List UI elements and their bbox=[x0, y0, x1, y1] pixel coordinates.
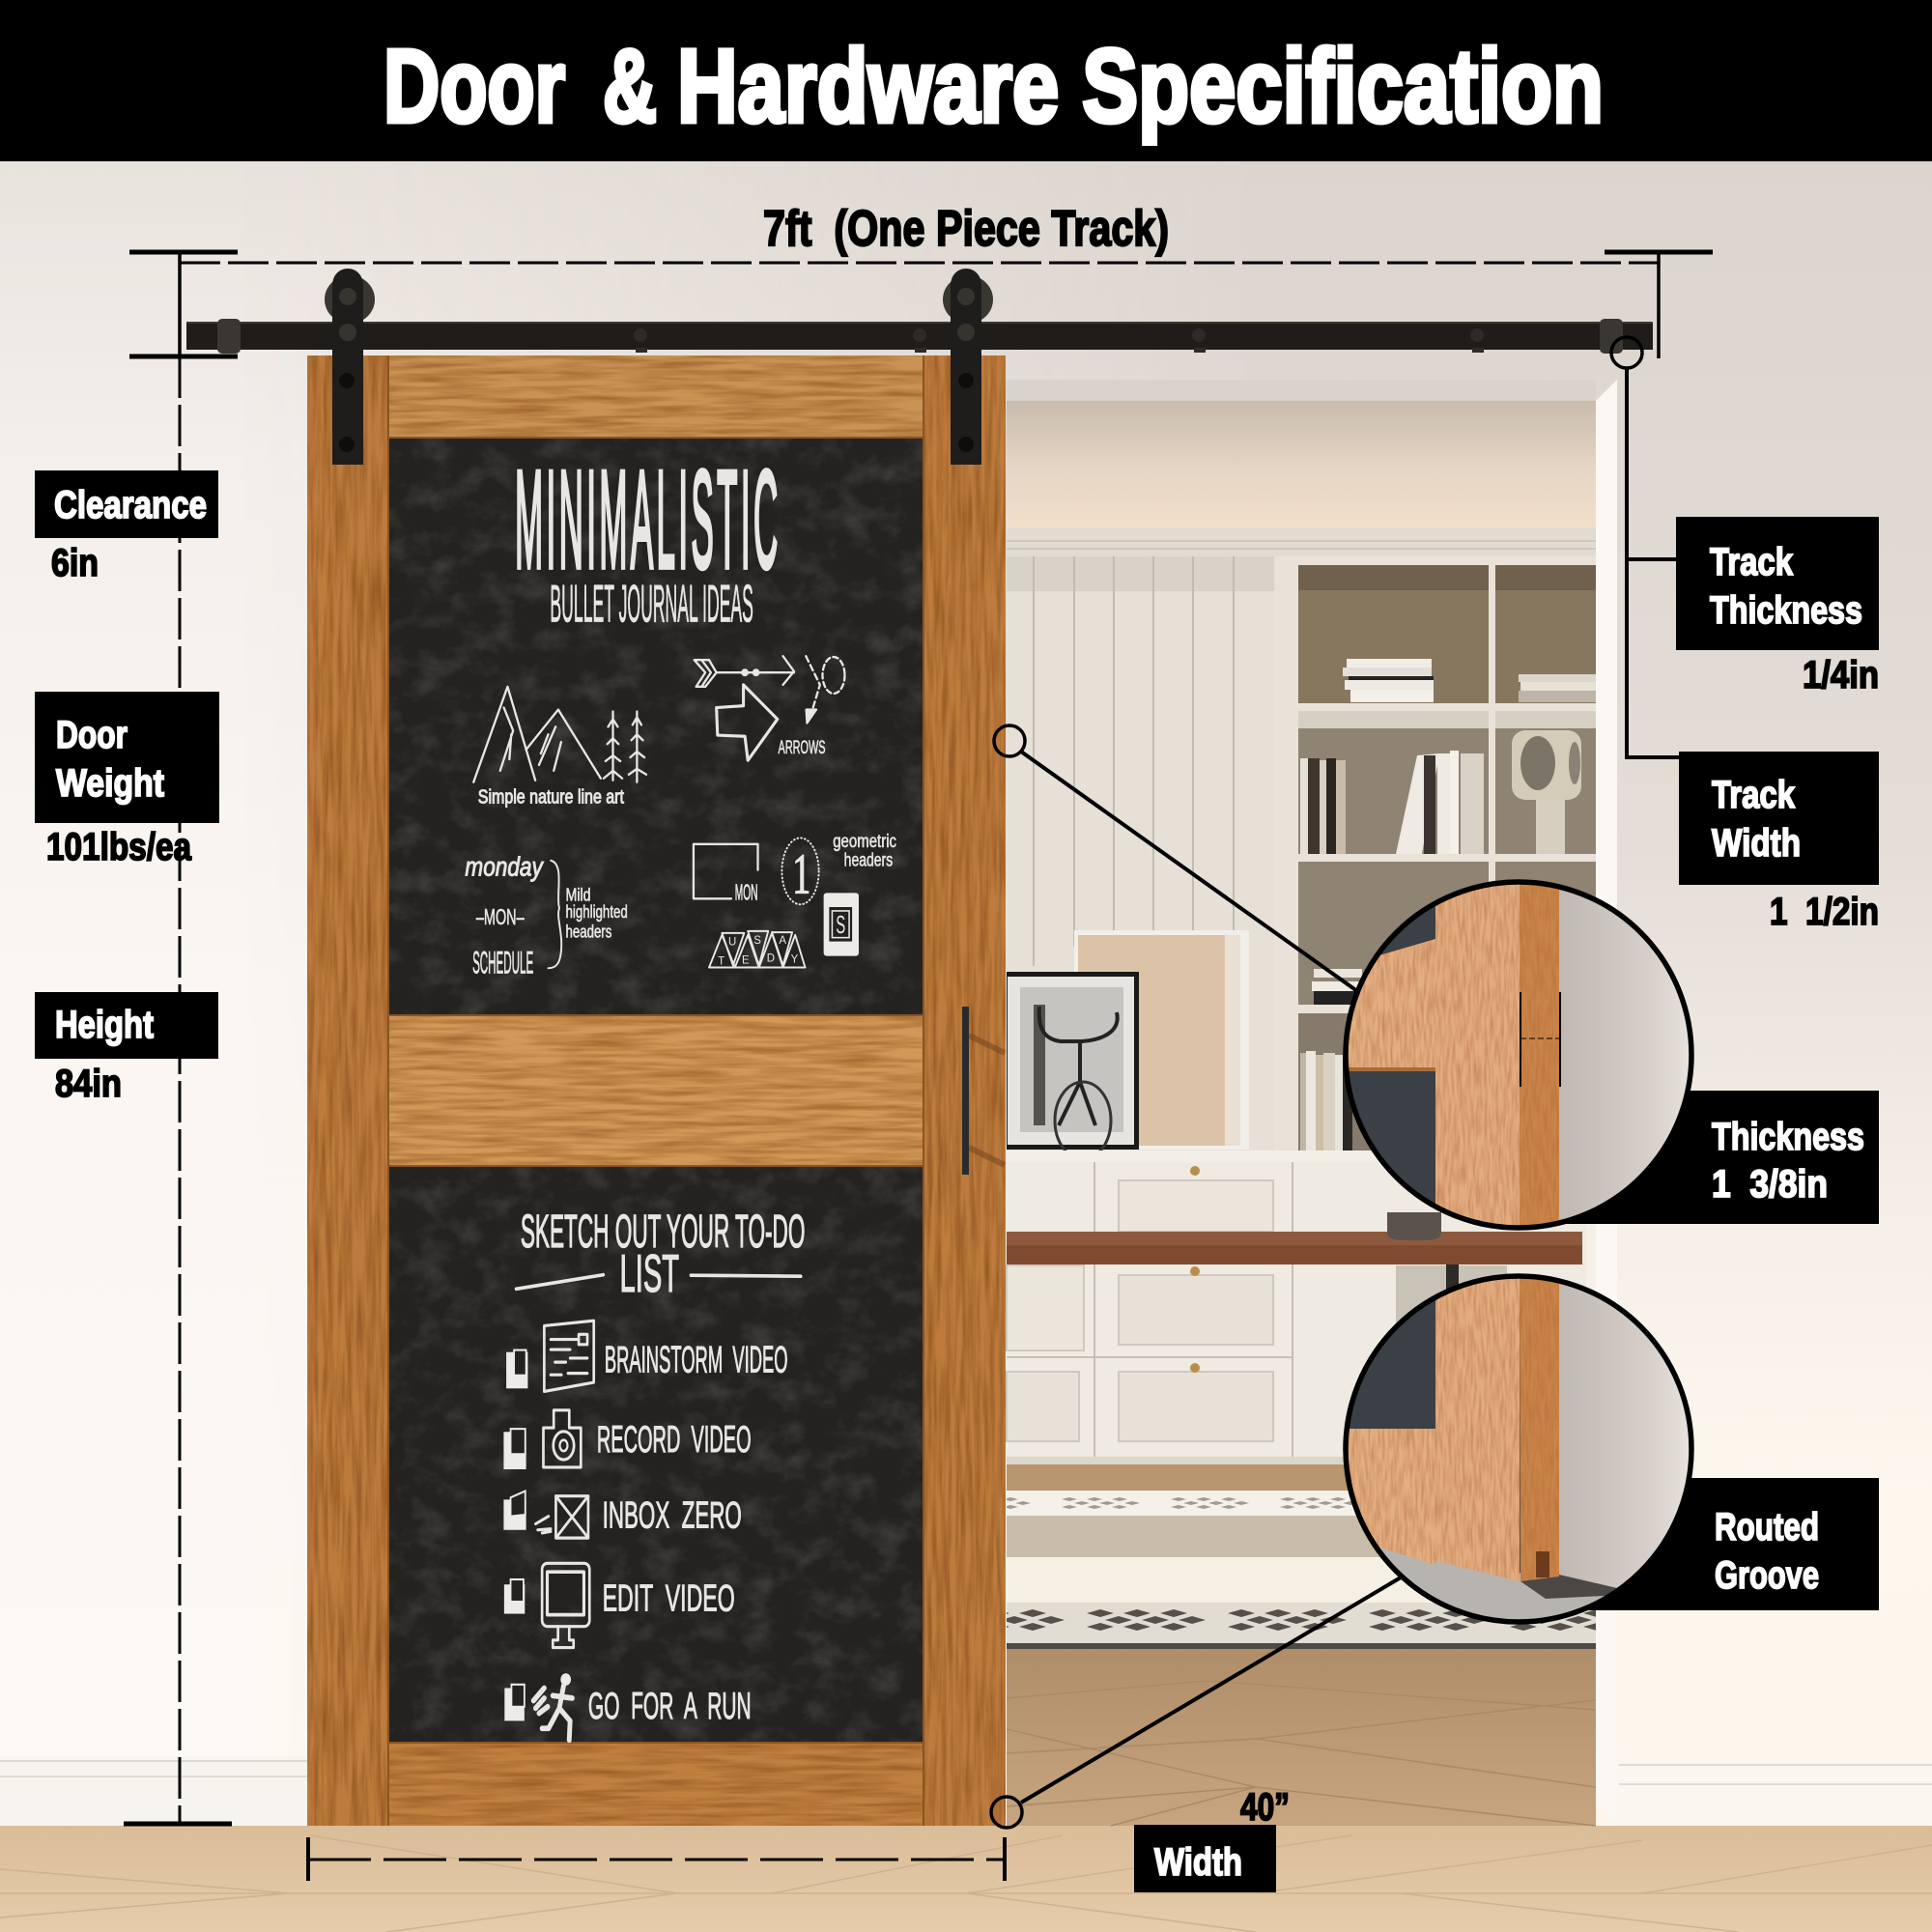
to-do: brainstorm video: BRAINSTORM VIDEO bbox=[605, 1338, 788, 1380]
to-do: inbox zero bbox=[503, 1491, 742, 1538]
right hanger strap bbox=[951, 269, 981, 465]
chalk geometric headers: 1 bbox=[792, 842, 810, 906]
cabinets bbox=[1007, 1151, 1596, 1464]
right hanger wheel bbox=[943, 275, 993, 324]
to-do: brainstorm video bbox=[506, 1321, 788, 1391]
bookcase bbox=[1274, 556, 1596, 1160]
chalk geometric headers: S bbox=[753, 934, 761, 947]
chalk geometric headers: Y bbox=[791, 953, 798, 966]
label: track width bbox=[1679, 752, 1879, 933]
label: door weight: 101lbs/ea bbox=[46, 826, 192, 868]
lower chalk to-do list bbox=[503, 1207, 805, 1740]
magnifier: routed groove detail bbox=[1343, 1273, 1700, 1633]
label: routed groove bbox=[1575, 1478, 1879, 1610]
upper chalk drawing bbox=[465, 441, 896, 980]
chalk caption: nature line art: Simple nature line art bbox=[478, 786, 624, 809]
chalk arrows bbox=[695, 656, 844, 760]
patterned rug bbox=[1007, 1491, 1596, 1649]
track bolts bbox=[634, 328, 1484, 353]
chalk list subheading bbox=[516, 1243, 801, 1303]
chalk list subheading: LIST bbox=[619, 1243, 679, 1303]
title: Door bbox=[384, 27, 565, 144]
panelled wall bbox=[1007, 556, 1287, 1155]
chalk highlighted headers bbox=[465, 851, 628, 980]
label: thickness: 1 3/8in bbox=[1712, 1163, 1828, 1206]
to-do: record video: RECORD VIDEO bbox=[597, 1418, 752, 1461]
chalk highlighted headers: Mild bbox=[566, 885, 591, 904]
foreground wood floor bbox=[0, 1826, 1932, 1932]
header bar bbox=[0, 0, 1932, 161]
left hanger wheel bbox=[325, 275, 375, 324]
framed bicycle photo bbox=[1007, 972, 1139, 1159]
label: track width: Width bbox=[1712, 822, 1801, 865]
chalk highlighted headers: SCHEDULE bbox=[472, 945, 533, 980]
label: track thickness bbox=[1676, 517, 1879, 696]
to-do: edit video: EDIT VIDEO bbox=[603, 1577, 735, 1619]
label: track width: 1 1/2in bbox=[1770, 891, 1879, 933]
left hanger strap bbox=[332, 269, 363, 465]
opening soffit and ceiling bbox=[1007, 380, 1596, 556]
chalk highlighted headers: headers bbox=[566, 922, 611, 942]
infographic canvas: MINIMALISTIC bbox=[515, 441, 781, 597]
track stops bbox=[217, 319, 1623, 354]
label: height bbox=[35, 992, 218, 1105]
title bbox=[384, 27, 1604, 144]
rear floor bbox=[1007, 1464, 1596, 1826]
label: width bbox=[1134, 1786, 1290, 1892]
chalk geometric headers: MON bbox=[735, 880, 758, 905]
label: routed groove: Routed bbox=[1715, 1506, 1819, 1548]
label: track thickness: 1/4in bbox=[1803, 654, 1879, 696]
room seen through the opening bbox=[1007, 380, 1596, 1826]
upper chalk drawing: BULLET JOURNAL IDEAS bbox=[550, 575, 753, 634]
chalk geometric headers: geometric bbox=[833, 831, 896, 852]
dimension: track length and clearance bbox=[124, 252, 1713, 1824]
framed abstract art bbox=[1074, 930, 1249, 1150]
thickness measure ticks bbox=[1520, 992, 1560, 1087]
chalk geometric headers: E bbox=[742, 953, 750, 967]
label: clearance: 6in bbox=[51, 542, 99, 584]
label: door weight bbox=[35, 692, 219, 868]
label: track thickness: Thickness bbox=[1710, 589, 1862, 632]
chalk highlighted headers: –MON– bbox=[476, 905, 525, 929]
to-do: inbox zero: INBOX ZERO bbox=[603, 1493, 742, 1536]
label: clearance: Clearance bbox=[54, 484, 207, 526]
label: door weight: Weight bbox=[56, 762, 164, 805]
door stiles bbox=[307, 355, 1006, 1826]
to-do: edit video bbox=[504, 1563, 735, 1648]
chalk list heading: SKETCH OUT YOUR TO-DO bbox=[521, 1207, 805, 1258]
chalk geometric headers bbox=[694, 831, 896, 967]
label: track width: Track bbox=[1712, 774, 1796, 816]
label: width: 40” bbox=[1240, 1786, 1290, 1829]
to-do: go for a run: GO FOR A RUN bbox=[588, 1684, 752, 1726]
label: thickness bbox=[1546, 1091, 1879, 1224]
chalk geometric headers: D bbox=[767, 952, 775, 965]
door rails bbox=[388, 355, 923, 1826]
label: track thickness: Track bbox=[1710, 541, 1794, 583]
chalk highlighted headers: highlighted bbox=[566, 902, 628, 922]
title: Hardware Specification bbox=[677, 27, 1604, 144]
title: & bbox=[603, 27, 657, 144]
barn door track bbox=[186, 319, 1653, 354]
door jamb bbox=[1596, 380, 1617, 1826]
books and sculpture bbox=[1300, 659, 1596, 1151]
label: width: Width bbox=[1154, 1841, 1242, 1884]
label: clearance bbox=[35, 470, 218, 584]
to-do: record video bbox=[503, 1410, 752, 1469]
chalk caption: arrows: ARROWS bbox=[779, 737, 826, 757]
callout leader lines bbox=[991, 337, 1681, 1828]
desk and cup bbox=[1007, 1212, 1582, 1293]
handle shadow bbox=[969, 1036, 1005, 1165]
chalk geometric headers: A bbox=[779, 934, 786, 947]
label: door weight: Door bbox=[56, 714, 128, 756]
chalk geometric headers: S bbox=[836, 912, 845, 939]
magnifier: door thickness detail bbox=[1343, 879, 1699, 1232]
chalk geometric headers: U bbox=[728, 935, 736, 949]
chalkboard panels bbox=[389, 438, 923, 1743]
chalk geometric headers: headers bbox=[844, 849, 893, 871]
barn door bbox=[307, 355, 1006, 1826]
door handle bbox=[962, 1007, 969, 1175]
chalk highlighted headers: monday bbox=[465, 851, 544, 882]
label: thickness: Thickness bbox=[1712, 1116, 1864, 1158]
width dimension bbox=[308, 1837, 1005, 1881]
chalk geometric headers: T bbox=[718, 954, 724, 967]
label: height: 84in bbox=[55, 1063, 122, 1105]
chalk mountains and trees bbox=[473, 687, 646, 782]
track length label: 7ft (One Piece Track) bbox=[763, 201, 1169, 257]
to-do: go for a run bbox=[504, 1673, 752, 1740]
label: routed groove: Groove bbox=[1715, 1554, 1819, 1597]
label: height: Height bbox=[55, 1004, 154, 1046]
